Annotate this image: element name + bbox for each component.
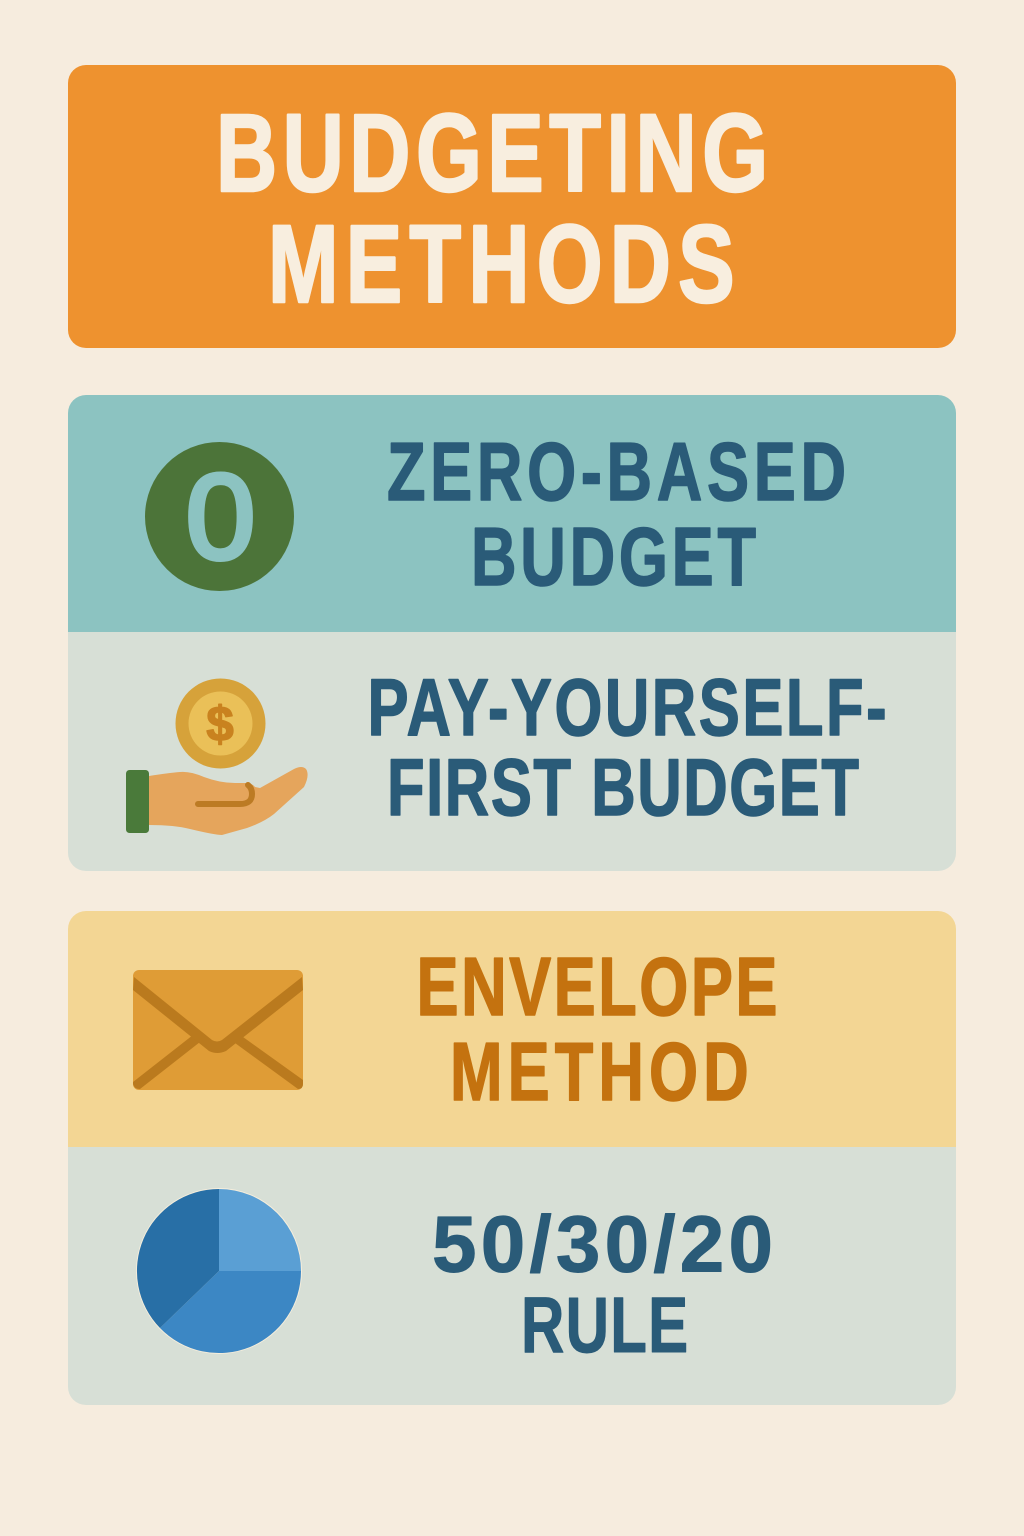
title banner: [68, 65, 956, 348]
icon: hand holding coin: $: [206, 698, 234, 752]
panel: envelope method: [68, 911, 956, 1147]
heading: envelope method: ENVELOPE: [416, 940, 778, 1033]
heading: envelope method: [416, 940, 778, 1118]
icon: zero coin: [145, 442, 294, 591]
panel: zero-based budget: [68, 395, 956, 632]
heading: pay-yourself-first budget: [368, 663, 887, 833]
title text: BUDGETING: [216, 91, 768, 215]
title text: [216, 91, 768, 326]
panel: pay-yourself-first budget: [68, 632, 956, 871]
heading: zero-based budget: BUDGET: [471, 510, 756, 603]
icon: envelope: [133, 970, 303, 1090]
heading: zero-based budget: ZERO-BASED: [387, 425, 846, 518]
heading: 50/30/20 rule: 50/30/20: [432, 1200, 773, 1288]
icon: zero coin: 0: [186, 450, 255, 585]
icon: pie chart: [136, 1188, 302, 1354]
heading: envelope method: METHOD: [450, 1025, 749, 1118]
panel: 50/30/20 rule: [68, 1147, 956, 1405]
heading: pay-yourself-first budget: FIRST BUDGET: [387, 743, 859, 833]
title text: METHODS: [268, 202, 735, 326]
icon: hand holding coin: [126, 678, 308, 835]
heading: pay-yourself-first budget: PAY-YOURSELF-: [368, 663, 887, 753]
heading: 50/30/20 rule: RULE: [521, 1280, 688, 1369]
heading: zero-based budget: [387, 425, 846, 603]
heading: 50/30/20 rule: [432, 1200, 773, 1369]
